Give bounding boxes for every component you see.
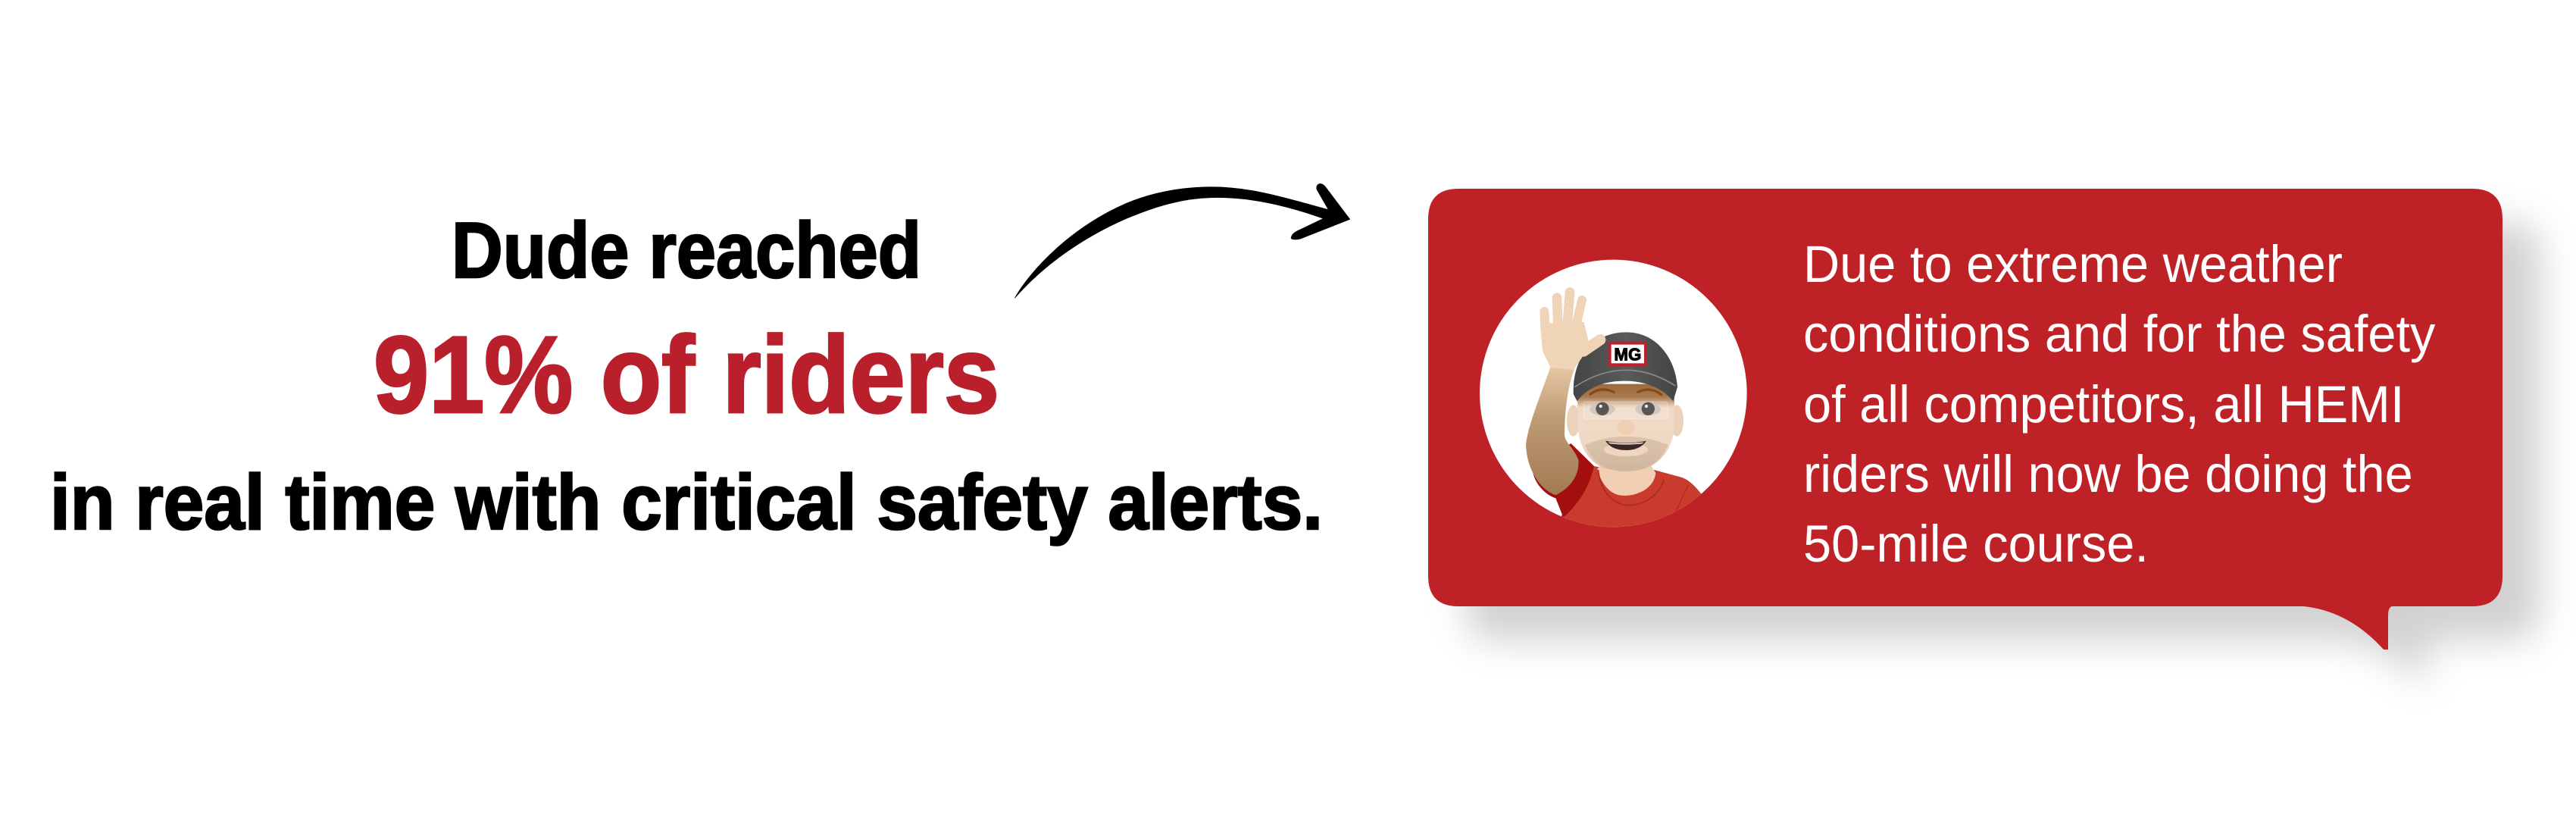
arm [1526,366,1578,495]
nose [1618,420,1634,435]
arrow pointing to speech bubble [1014,183,1350,298]
cap seam [1574,370,1676,387]
face [1577,384,1674,471]
bubble body [1428,189,2503,650]
ears [1567,405,1578,437]
speech bubble panel [1428,189,2540,684]
chin highlight [1603,446,1649,456]
message line 2: conditions and for the safety [1803,305,2435,363]
headline text [50,207,1323,546]
bubble shadow [1466,223,2540,684]
infographic canvas [55,183,2556,684]
neck [1597,462,1655,496]
avatar: waving memoji in white circle [1480,260,1747,543]
headline line 3: in real time with critical safety alerts. [50,459,1323,546]
mouth [1605,441,1646,450]
bubble message text [1803,236,2435,573]
headline line 1: Dude reached [452,207,921,295]
cap logo [1608,342,1647,366]
message line 3: of all competitors, all HEMI [1803,376,2404,434]
waving hand [1540,292,1600,370]
beard shading [1585,437,1668,471]
message line 4: riders will now be doing the [1803,446,2413,503]
headline stat: 91% of riders: 91% of riders [374,314,999,436]
memoji figure [1526,292,1707,543]
glasses [1583,402,1668,419]
sleeve [1533,443,1594,518]
shirt [1561,466,1702,527]
eyebrows [1590,390,1662,395]
cap logo: MG [1614,344,1641,364]
collar [1598,470,1664,506]
eyes [1590,403,1615,415]
message line 5: 50-mile course. [1803,515,2149,573]
cap [1574,332,1677,401]
message line 1: Due to extreme weather [1803,236,2343,293]
avatar circle [1480,260,1747,527]
